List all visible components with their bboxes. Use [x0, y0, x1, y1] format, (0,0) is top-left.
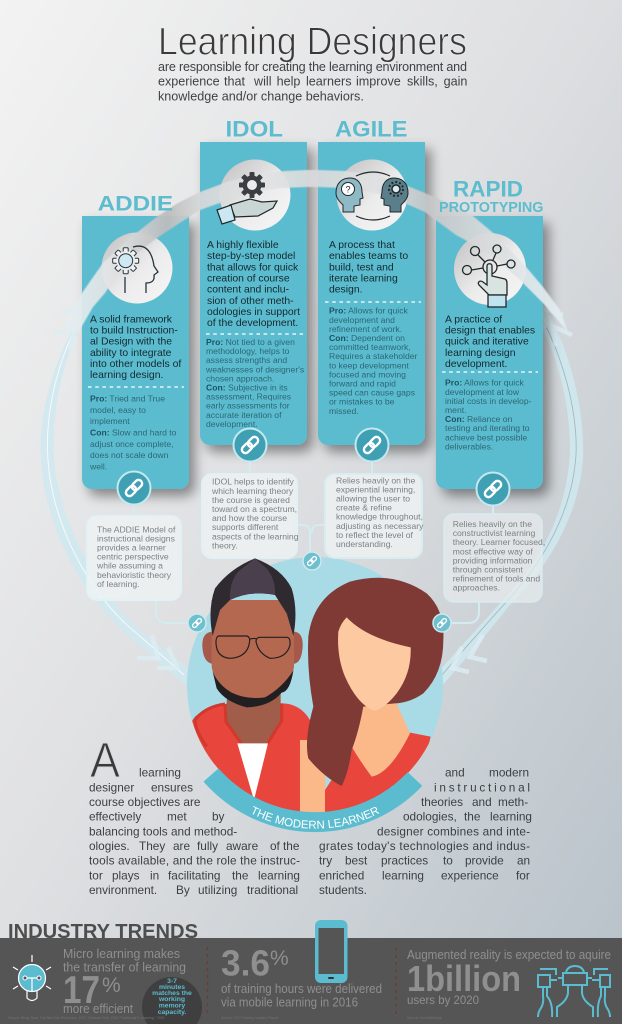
AGILE pros and cons: refinement of work.	[329, 324, 402, 334]
heading: ADDIE: ADDIE	[98, 192, 173, 216]
right column text: experience	[441, 868, 499, 882]
IDOL content	[205, 117, 304, 429]
female face	[338, 617, 411, 711]
ADDIE description: learning design.	[90, 370, 163, 381]
right column text: modern	[489, 766, 529, 780]
icon: gear above hand	[217, 172, 277, 224]
AGILE pros and cons: development and	[329, 315, 395, 325]
left column text: learning	[139, 766, 181, 780]
left column text: ologies.	[89, 839, 130, 853]
left column text: aware	[226, 839, 259, 853]
right column text: grates today's technologies and indus-	[319, 839, 530, 853]
heading: RAPID PROTOTYPING: PROTOTYPING	[439, 200, 544, 216]
card: ADDIE theory: instructional designs	[97, 533, 175, 543]
ADDIE description: A solid framework	[90, 314, 173, 325]
IDOL pros and cons	[205, 334, 304, 429]
ADDIE description: ability to integrate	[90, 348, 172, 359]
card: IDOL theory: aspects of the learning	[212, 531, 299, 541]
card: RAPID theory: most effective way of	[453, 546, 533, 556]
right column text: best	[345, 854, 368, 868]
RAPID description: quick and iterative	[445, 337, 529, 348]
intro text: experience	[158, 75, 220, 89]
callout: 3-7 minutes: capacity.	[158, 1009, 186, 1016]
card: RAPID theory	[444, 514, 545, 602]
stat: mobile learning: via mobile learning in 2016	[221, 996, 358, 1010]
stat: mobile learning	[221, 943, 382, 1010]
jacket collar	[194, 702, 284, 748]
card: AGILE theory: Relies heavily on the	[336, 475, 416, 485]
heading: RAPID PROTOTYPING: RAPID	[453, 177, 523, 202]
AGILE description: design.	[329, 285, 363, 296]
right column text: meth-	[498, 795, 528, 809]
left column text: tools available, and the role the instruc-	[89, 854, 300, 868]
card: IDOL theory	[202, 474, 299, 558]
icon: small link right	[433, 614, 451, 632]
AGILE pros and cons: Con: Dependent on	[329, 333, 405, 343]
right column text: the	[464, 810, 481, 824]
right column text: and	[472, 795, 492, 809]
IDOL description: sion of other meth-	[207, 296, 294, 307]
right column text: odologies,	[403, 810, 457, 824]
AGILE description: build, test and	[329, 262, 394, 273]
icon: smartphone	[315, 920, 348, 983]
ADDIE content	[88, 192, 184, 471]
left column text: environment.	[89, 883, 157, 897]
RAPID description: A practice of	[445, 314, 502, 325]
stat: mobile learning: 3.6	[221, 943, 270, 984]
IDOL description: content and inclu-	[207, 285, 289, 296]
panel: RAPID card	[436, 216, 543, 489]
question mark: ?	[345, 184, 351, 194]
right column text: learning	[490, 810, 532, 824]
AGILE pros and cons: forward and rapid	[329, 378, 396, 388]
right column text: provide	[465, 854, 504, 868]
ADDIE pros and cons: adjust once complete,	[90, 439, 174, 449]
IDOL description: step-by-step model	[207, 251, 295, 262]
RAPID pros and cons: testing and iterating to	[445, 423, 530, 433]
card: IDOL theory: and how the course	[212, 513, 287, 523]
male hair	[210, 558, 295, 636]
AGILE content	[325, 117, 421, 416]
card: ADDIE theory	[87, 516, 181, 600]
callout: 3-7 minutes	[142, 977, 202, 1024]
beard	[213, 671, 293, 707]
ADDIE description: al Design with the	[90, 337, 172, 348]
icon: large link IDOL	[234, 428, 266, 462]
left column text: effectively	[89, 810, 141, 824]
right column text: try	[319, 854, 332, 868]
stat: micro learning	[63, 947, 186, 1016]
callout: 3-7 minutes: memory	[159, 1002, 185, 1010]
divider	[395, 948, 397, 1016]
RAPID pros and cons: achieve best possible	[445, 432, 527, 442]
left column text: learning	[258, 868, 300, 882]
stat: mobile learning: of training hours were delivered	[221, 982, 382, 996]
intro text: skills,	[407, 75, 438, 89]
IDOL pros and cons: accurate iteration of	[206, 410, 282, 420]
callout: 3-7 minutes: matches the	[152, 990, 192, 997]
ADDIE pros and cons: model, easy to	[90, 405, 146, 415]
AGILE pros and cons: speed can cause gaps	[329, 388, 415, 398]
stat: augmented reality: Augmented reality is expected to aquire	[407, 948, 611, 962]
IDOL description: odologies in support	[207, 307, 300, 318]
AGILE description: iterate learning	[329, 274, 398, 284]
card: RAPID theory: Relies heavily on the	[453, 519, 532, 529]
right column text: students.	[319, 883, 367, 897]
card: IDOL theory: supports different	[212, 522, 279, 532]
card: RAPID theory: approaches.	[453, 583, 500, 593]
red jacket	[192, 703, 310, 812]
ADDIE description: to build Instruction-	[90, 326, 178, 336]
right column text: and	[445, 766, 465, 780]
divider	[206, 947, 208, 1016]
male neck	[225, 693, 281, 747]
IDOL description: A highly flexible	[207, 240, 279, 251]
card: ADDIE theory: of learning.	[97, 579, 140, 589]
IDOL pros and cons: Pro: Not tied to a given	[206, 337, 295, 347]
outer ring: left arrow	[41, 307, 188, 685]
RAPID pros and cons: Pro: Allows for quick	[445, 378, 525, 388]
banner: the modern learner: THE MODERN LEARNER	[252, 806, 380, 829]
left column text: of	[270, 839, 281, 853]
card: IDOL theory: the course is geared	[212, 495, 290, 505]
right column text	[319, 766, 532, 897]
AGILE pros and cons: focused and moving	[329, 369, 406, 379]
right column text: enriched	[319, 868, 364, 882]
right column text: designer combines and inte-	[377, 824, 530, 838]
swoosh band across panels	[64, 170, 568, 333]
card: RAPID theory: refinement of tools and	[453, 574, 540, 584]
left column text: traditional	[247, 883, 298, 897]
stat: augmented reality	[407, 948, 611, 1007]
RAPID description	[445, 314, 535, 370]
icon disc: AGILE	[336, 160, 408, 230]
left column text: are	[173, 839, 190, 853]
stat: micro learning: %	[102, 974, 121, 997]
male face	[212, 600, 294, 703]
intro text	[158, 60, 467, 103]
intro text: knowledge and/or change behaviors.	[158, 89, 364, 103]
intro text: learners	[306, 75, 352, 89]
stat: micro learning: 17	[63, 969, 100, 1012]
ADDIE description	[90, 314, 181, 381]
illustration: the modern learners	[192, 558, 444, 812]
card: AGILE theory: allowing the user to	[336, 494, 410, 504]
icon: VR headset people	[538, 966, 610, 1017]
left column text: ensures	[151, 780, 193, 794]
IDOL pros and cons: early assessments for	[206, 401, 290, 411]
AGILE pros and cons: or mistakes to be	[329, 397, 395, 407]
title: Learning Designers	[158, 20, 467, 64]
intro text: improve	[356, 75, 401, 89]
connector lines	[134, 462, 493, 623]
AGILE description: A process that	[329, 240, 395, 251]
card: AGILE theory: experiential learning,	[336, 484, 415, 494]
card: RAPID theory: theory. Learner focused,	[453, 537, 545, 547]
card: ADDIE theory: provides a learner	[97, 542, 166, 552]
heading: RAPID PROTOTYPING	[439, 177, 544, 216]
RAPID description: design that enables	[445, 326, 535, 336]
card: AGILE theory: understanding.	[336, 539, 393, 549]
icon: small link centre	[303, 552, 321, 570]
icon: large link RAPID	[476, 472, 510, 506]
IDOL description: creation of course	[207, 274, 290, 284]
left column text: They	[139, 839, 165, 853]
card: RAPID theory: constructivist learning	[453, 528, 536, 538]
icon disc: RAPID	[454, 233, 526, 305]
ADDIE pros and cons: implement	[90, 416, 130, 426]
panel: AGILE card	[318, 142, 425, 445]
female neck	[353, 700, 410, 777]
icon: large link AGILE	[356, 428, 388, 462]
female hair	[307, 578, 443, 786]
stat: micro learning: the transfer of learning	[63, 961, 186, 975]
heading: industry trends: INDUSTRY TRENDS	[8, 920, 198, 943]
glasses	[216, 636, 290, 658]
male hair top	[230, 558, 275, 600]
IDOL pros and cons: Con: Subjective in its	[206, 382, 288, 392]
heading: AGILE: AGILE	[335, 117, 408, 142]
card: AGILE theory	[325, 474, 424, 558]
ADDIE pros and cons: Con: Slow and hard to	[90, 428, 177, 438]
banner: the modern learner	[204, 768, 422, 832]
IDOL description	[207, 240, 300, 329]
RAPID pros and cons: Con: Reliance on	[445, 414, 513, 424]
intro text: that	[224, 75, 246, 89]
icon: light bulb	[13, 955, 51, 1000]
callout: 3-7 minutes: 3-7	[167, 978, 177, 985]
outer ring: right arrow	[440, 307, 583, 688]
card: AGILE theory: create & refine	[336, 503, 392, 513]
card: IDOL theory: IDOL helps to identify	[212, 477, 295, 487]
card: AGILE theory: knowledge throughout,	[336, 512, 423, 522]
RAPID description: learning design	[445, 348, 516, 359]
RAPID pros and cons	[442, 372, 538, 451]
stat: micro learning: Micro learning makes	[63, 947, 180, 961]
left column text: course objectives are	[89, 795, 201, 809]
left column text: utilizing	[198, 883, 237, 897]
left column text: the	[232, 868, 249, 882]
callout: 3-7 minutes: minutes	[159, 984, 185, 991]
left column text: plays	[112, 868, 140, 882]
icon: two heads exchanging ideas	[336, 172, 408, 220]
AGILE pros and cons: committed teamwork,	[329, 342, 411, 352]
callout: 3-7 minutes: working	[158, 996, 185, 1003]
AGILE pros and cons: Pro: Allows for quick	[329, 306, 409, 316]
ADDIE pros and cons	[88, 387, 184, 472]
right column text: theories	[421, 795, 463, 809]
card: ADDIE theory: centric perspective	[97, 552, 169, 562]
IDOL pros and cons: development.	[206, 419, 258, 429]
source note: micro learning: Source: Mindy Sera, The Bite-Size Revolution, 2017; Software Trial, 2016 "Traditional E-Learning," 2016	[8, 1016, 165, 1020]
paragraph: learning designer	[89, 734, 532, 897]
left column text: tor	[89, 868, 103, 882]
white shirt	[237, 743, 268, 800]
AGILE description: enables teams to	[329, 251, 408, 262]
left column text: balancing tools and method-	[89, 824, 237, 838]
icon: large link ADDIE	[118, 472, 150, 504]
RAPID pros and cons: development at low	[445, 387, 520, 397]
card: AGILE theory: adjusting as necessary	[336, 521, 424, 531]
intro text: gain	[444, 75, 467, 89]
IDOL pros and cons: assess strengths and	[206, 355, 287, 365]
left column text: designer	[89, 780, 134, 794]
card: ADDIE theory: while assuming a	[96, 561, 163, 571]
icon disc: ADDIE	[102, 232, 172, 304]
AGILE pros and cons: missed.	[329, 406, 359, 416]
icon: hand touching network	[462, 245, 515, 307]
right column text: practices	[381, 854, 428, 868]
ADDIE pros and cons: Pro: Tried and True	[90, 394, 165, 404]
left column text: the	[283, 839, 300, 853]
panel: ADDIE card	[82, 216, 189, 489]
IDOL pros and cons: weaknesses of designer's	[205, 364, 304, 374]
RAPID pros and cons: ment.	[445, 405, 466, 415]
AGILE description	[329, 240, 408, 296]
card: RAPID theory: providing information	[453, 555, 533, 565]
card: ADDIE theory: behavioristic theory	[97, 570, 172, 580]
card: ADDIE theory: The ADDIE Model of	[97, 524, 176, 534]
right column text: learning	[382, 868, 424, 882]
card: RAPID theory: through consistent	[453, 564, 524, 574]
stat: mobile learning: %	[270, 947, 289, 970]
stat: augmented reality: users by 2020	[407, 993, 479, 1007]
IDOL pros and cons: chosen approach.	[206, 373, 274, 383]
intro text: help	[277, 75, 300, 89]
IDOL pros and cons: assessment, Requires	[206, 392, 291, 402]
AGILE pros and cons: to keep development	[329, 360, 409, 370]
IDOL description: that allows for quick	[207, 262, 299, 273]
male ears	[202, 632, 303, 664]
female arm	[300, 740, 326, 812]
left column text: in	[150, 868, 159, 882]
stat: micro learning: more efficient	[63, 1002, 133, 1016]
IDOL pros and cons: methodology, helps to	[206, 346, 290, 356]
icon disc: IDOL	[220, 160, 290, 230]
ADDIE pros and cons: well.	[89, 462, 107, 472]
RAPID pros and cons: initial costs in develop-	[445, 396, 532, 406]
left column text: by	[212, 810, 225, 824]
icon: small link left	[188, 614, 206, 632]
card: IDOL theory: toward on a spectrum,	[212, 504, 297, 514]
intro text: will	[253, 75, 272, 89]
left column text: met	[167, 810, 187, 824]
IDOL description: of the development.	[207, 318, 298, 329]
icon: head with gear	[113, 246, 158, 293]
female top	[325, 732, 431, 812]
AGILE pros and cons	[325, 302, 421, 416]
drop cap: A	[90, 734, 120, 788]
RAPID content	[439, 177, 544, 451]
RAPID description: development.	[445, 359, 507, 370]
ADDIE description: into other models of	[90, 359, 181, 370]
panel: IDOL card	[200, 142, 307, 445]
source note: augmented reality: Source: HomeAlertApp	[407, 1016, 442, 1020]
card: AGILE theory: to reflect the level of	[336, 530, 414, 540]
card: IDOL theory: which learning theory	[211, 486, 294, 496]
RAPID pros and cons: deliverables.	[445, 441, 493, 451]
heading: IDOL: IDOL	[226, 117, 283, 142]
left column text: fully	[197, 839, 218, 853]
right column text: for	[516, 868, 530, 882]
right column text: instructional	[434, 780, 530, 794]
card: IDOL theory: theory.	[212, 540, 238, 550]
right column text: to	[443, 854, 453, 868]
AGILE pros and cons: Requires a stakeholder	[329, 351, 418, 361]
stat: augmented reality: 1billion	[407, 958, 521, 999]
left column text: By	[176, 883, 190, 897]
left column text	[89, 766, 300, 897]
panel: industry trends band	[0, 938, 622, 1024]
ADDIE pros and cons: does not scale down	[90, 450, 169, 460]
right column text: an	[517, 854, 530, 868]
intro text: are responsible for creating the learning environment and	[158, 60, 467, 74]
source note: mobile: Source: 2017 Training Industry Report	[221, 1016, 278, 1020]
learner circle	[187, 557, 443, 813]
left column text: facilitating	[168, 868, 220, 882]
